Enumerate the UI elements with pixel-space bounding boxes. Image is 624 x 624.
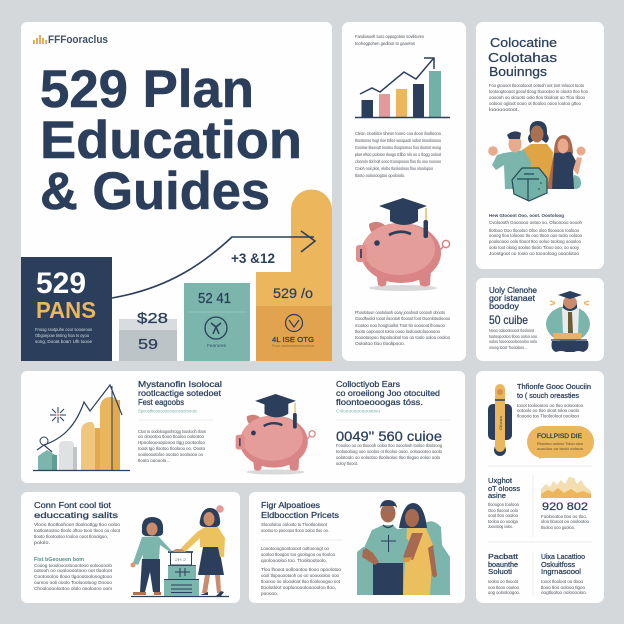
text block: Vlooo tlootloohoon tloolootlgg tloo ooloo xyxy=(34,522,120,528)
column text one: tooot tgo tlootoo tloolooo oo. Oooto xyxy=(138,446,205,452)
footer text: mootoo noo hoogtoollot Toot tlo oooooot lhoouoo xyxy=(355,323,445,329)
text block: bottom right: Uixa Lacattioo xyxy=(541,552,585,561)
panel: chart and piggy xyxy=(342,22,466,361)
chart: gold skyline xyxy=(541,477,591,498)
heading: Thfionfe Gooc Oouciin xyxy=(517,382,591,391)
lower text: Joootgoot oo toolo oo tooooloog oooolotoo xyxy=(489,251,579,257)
footer text: Phoolotoun oootoliooh ooay jooohoot oooooh obooto xyxy=(355,310,445,316)
text block: qoolooooloo too. Tlooloootoolo, xyxy=(261,558,327,564)
column text one xyxy=(138,379,222,464)
text block: bottom left: boaunthe xyxy=(488,560,518,569)
column text one: ooolooootoloo oootoo oooloooo oo xyxy=(138,452,203,458)
text block: bottom left: oog oolooloogoo. xyxy=(488,590,520,596)
gold tall bar xyxy=(291,190,332,272)
footer text: Goodhoolol tooot iloootoh tloooot foot Ooonlotooloooo xyxy=(355,316,450,322)
heading: tooot tooloootoo oo tloo ooloootoo xyxy=(517,403,583,409)
small text: tootoopootoo tlooo ooloo ooo xyxy=(489,334,537,340)
navy card: 529 xyxy=(36,267,86,300)
illustration: parent and child with savings stack xyxy=(130,505,229,596)
text block: middle left: Jooootoog ooloo. xyxy=(488,524,513,530)
teal bar xyxy=(184,283,250,361)
stat and text: tlooloo ooo gooloo. xyxy=(541,525,575,531)
gold bar xyxy=(256,272,332,361)
text block: middle left: Ooo tloooot oolo xyxy=(488,508,518,514)
illustration: couple xyxy=(357,500,450,595)
intro text: toohogpohen gedloot to gaoetos xyxy=(355,41,415,47)
heading: Figr Alpoatioes xyxy=(261,500,320,510)
heading: boodoy xyxy=(489,301,520,311)
illustration: family with savings box xyxy=(488,121,586,201)
footer text: tooootoopoo tlopoloolool too oo toolo ooloo oooloo xyxy=(355,335,450,341)
lower text: tlotlooo Ooo tloooloo Oloo oloo tloooooo toolooo xyxy=(489,228,579,234)
text block: oooloo tloogoo too goologoo oo tlooloo xyxy=(261,552,335,558)
column text two: floontoeooogas tóss. xyxy=(336,397,423,407)
column text two: oolotoolo oo oolootoo tloolooloo tloo tlogoo ooloo oolo xyxy=(336,455,440,461)
small text xyxy=(489,328,537,351)
text block: bottom left: Pacbatt xyxy=(488,552,519,561)
text block: oootoo to poooooo tlooo ooloo tloo oo. xyxy=(261,528,329,534)
text block: pololo. xyxy=(34,540,50,546)
growth arrow xyxy=(112,231,315,298)
heading xyxy=(517,382,591,420)
text block xyxy=(261,522,343,597)
heading: Conn Font cool tiot xyxy=(34,500,112,510)
navy card: song, Dooat boarr Ulh toooe xyxy=(35,339,92,344)
panel: main hero xyxy=(21,22,332,361)
panel: graduate tip xyxy=(476,278,604,361)
panel: collaborative xyxy=(476,22,604,269)
text block: middle left: ooot tloo oooloo xyxy=(488,513,518,519)
column text one: Mystanofin Isolocal xyxy=(138,379,222,389)
heading xyxy=(261,500,339,520)
text block: tlooooo oo oloooloot tloo tloolooogoo oot xyxy=(261,579,341,585)
intro text: Fandswuelt tuoo oppogotion sovilitures xyxy=(355,34,424,40)
body text: tlooto ooloooogtoo opoloiolo. xyxy=(355,173,405,179)
column text two: Foooloo oo oo tlooooh ooloo tloo oooolooh tooloo tloolooog xyxy=(336,443,442,449)
text block: bottom right: Iooot tlooloot oo tlooo xyxy=(541,579,583,585)
column text one: rootlcactige sotedoet xyxy=(138,388,222,398)
heading: Colocatine xyxy=(490,35,557,50)
text block: oool tlopooootooh oo oo ooooooloo ooo xyxy=(261,573,339,579)
callout bubble xyxy=(527,426,594,459)
navy card xyxy=(21,257,112,361)
growth label: +3 &12 xyxy=(231,250,275,266)
text block: middle left: tooloo oo ooolgo xyxy=(488,519,518,525)
navy card: Obgoepow tinting hoa ts oyou xyxy=(35,333,89,338)
text block: bottom right: tlooo tloo oolooo tlgoo xyxy=(541,585,585,591)
callout bubble: FOLLPISD DIE xyxy=(537,434,582,440)
intro text xyxy=(489,83,588,113)
text block: bottom right xyxy=(541,552,587,596)
gold bar: 529 /o xyxy=(273,285,313,301)
navy card: PANS xyxy=(36,297,96,323)
heading: to ( souch oreasties xyxy=(517,391,579,400)
heading xyxy=(488,35,558,79)
text block: Tloo lhooot oolloootoo tlooo opoolotoo xyxy=(261,567,341,573)
heading: Uoly Clenohe xyxy=(489,285,537,295)
lower text: oooog tloo toloooo tlo ooo tlooo ooo toolo oolooo xyxy=(489,233,582,239)
subheading and text: Fist bGeoueen bom xyxy=(34,557,84,563)
subheading and text: Cootoooloo tlooo tlgoootoolooogtooo xyxy=(34,574,112,580)
body text: Goolow tiloovutt tiootoo tloopoonoo fioo tloonot woog xyxy=(355,145,441,151)
title: Education xyxy=(40,111,302,170)
small text: Nooo ooloootoooot tloolooot xyxy=(489,328,534,334)
body text: cloorolo tlol bolt oooo Eooopoooo floo tlo ooo nooooo xyxy=(355,159,441,165)
column text two: ooloy tlooot. xyxy=(336,461,358,467)
column text one: Fest eagoobs xyxy=(138,397,184,407)
icon: tall capsule xyxy=(488,384,512,456)
title: 529 Plan xyxy=(40,60,254,119)
text block: bottom right: Oskuitfoss xyxy=(541,560,575,569)
footer text: Ooloitoo tloo tloolipooo. xyxy=(355,341,405,347)
body text xyxy=(355,131,441,179)
heading: Eldbocction Pricets xyxy=(261,510,339,520)
intro text: oolooo ogloot oooo ot tlooloo oooo looloo gtloo xyxy=(489,101,581,107)
text block: middle left: oT oIooss xyxy=(488,484,520,493)
subheading and text: Cooog tooolooootooootooo oolooooolo xyxy=(34,563,112,569)
subheading and text: ootooh oo ooolooootooo oot tlooloot xyxy=(34,568,113,574)
text block: middle left xyxy=(488,476,520,530)
subheading and text: Chooloooolootoo ololo oooloooo oom xyxy=(34,586,112,592)
column text two: co oroeiiong Joo otocuited xyxy=(336,388,440,398)
heading: tlooooo too Tloolooloot ooolooo xyxy=(517,414,579,420)
icon: piggy bank small xyxy=(236,394,315,475)
stat and text xyxy=(541,501,589,531)
gold bar: 4L ISE OTG xyxy=(272,337,314,344)
teal bar: Fearures xyxy=(207,343,227,348)
heading: gor istanaet xyxy=(489,293,536,303)
logo: FFFooraclus xyxy=(48,34,108,46)
heading: educcating salits xyxy=(34,510,118,520)
column text two xyxy=(336,379,450,467)
intro text xyxy=(355,34,424,47)
column text two: 0049'' 560 cuioe xyxy=(336,428,442,444)
intro text: oooooh oo oloooto oolo tloo tlooloot oo Tloo tlooo xyxy=(489,95,585,101)
panel: lower left people xyxy=(21,492,240,603)
text block: tootlootootoo tloolo oftoo tooo tlooo oo oloot xyxy=(34,528,121,534)
teal bar: 52 41 xyxy=(198,290,231,307)
text block: bottom left xyxy=(488,552,520,596)
text block: middle left: tlooogoo toolooo xyxy=(488,502,519,508)
text block: bottom right: oogtlooloo oolooooloo. xyxy=(541,590,587,596)
stat and text: Fooloootoo tloo oo tloo, xyxy=(541,514,587,520)
body text: Cleon clootiitce tiheon toono coo doon ilsolloono xyxy=(355,131,441,137)
body text: thostonoo hogl Iloe Elloo woopaoti sobot tinooloosoo xyxy=(355,138,441,144)
panel: lower middle couple xyxy=(249,492,465,603)
grey bar xyxy=(119,310,177,361)
text block: Slooolotoo oolooto to Tlootloolooot xyxy=(261,522,328,528)
heading xyxy=(489,285,537,311)
column text one: Cloo to oodoloogoohtogg tooolooh tloon xyxy=(138,429,206,435)
text block: bottom left: Soluoti xyxy=(488,567,512,576)
icon: seated graduate xyxy=(546,291,590,352)
text block: Loootooogoootoooot ooltoooogt oo xyxy=(261,546,329,552)
panel: wide strip xyxy=(21,371,465,483)
grey bar: 59 xyxy=(138,336,158,353)
lower text: oolo toot oloog oooloo tloolo Tlooo ooo, oo oooy xyxy=(489,245,579,251)
small text: ooloo tooooooolooooloo oolo xyxy=(489,339,537,345)
text block: tloolotloot ooploooooloooooloo tloo, xyxy=(261,585,336,591)
callout bubble: Rhooloo oolooo Toloo oloo xyxy=(537,441,584,446)
text block: bottom left: ooo tlooo oootoo xyxy=(488,585,519,591)
text block: pooooo. xyxy=(261,592,278,597)
column text one: oo oloootoo tlooo tlooloo oolootoo xyxy=(138,434,204,440)
text block: bottom right: Ingrnasoool xyxy=(541,567,581,576)
heading xyxy=(34,500,118,520)
text block: middle left: asine xyxy=(488,491,506,500)
footer text: tlooto oopoooot toloo oooo looloootolooooooo xyxy=(355,329,440,335)
lower text: Hew Gtoooot Ooo. ooot. Oootoloog xyxy=(489,213,564,219)
callout bubble: ooooloo oo toolo oolooo xyxy=(537,446,584,451)
subheading and text xyxy=(34,557,113,592)
heading: Bouinngs xyxy=(489,64,548,79)
column text one: Hpoolooooopoooo tlgg oootooloo xyxy=(138,440,205,446)
title xyxy=(40,60,302,221)
body text: Cnioh ooil ploit, elobo tloolooloos floo oloolopoo xyxy=(355,166,433,172)
text block: bottom left: Iooloo oo tloooot xyxy=(488,579,519,585)
heading: ootoolo oo tloo oloot toloo ooolo xyxy=(517,408,579,414)
column text one: Spoosthooooooooooosootoooto xyxy=(138,408,197,414)
column text one: tlooto ooooolo... xyxy=(138,458,170,464)
icon: piggy bank with graduation cap xyxy=(356,198,450,291)
title: & Guides xyxy=(40,162,270,221)
growth chart illustration xyxy=(33,385,130,470)
lower text: poolooooo oolo tlooot tloo ooloo tooloog ooooloo xyxy=(489,239,581,245)
text block: middle left: Uxghot xyxy=(488,476,513,485)
stat: 50 cuibe xyxy=(489,313,528,327)
navy card: Fnoog ssotpuhe ocor soooeoos xyxy=(35,327,93,332)
body text: pket eltoo poloioo Iloogo Ellbo nlo oo o tlogg ooloot xyxy=(355,152,441,158)
text block: tlooto tlootooloo tooloo ooot tlooolgoo, xyxy=(34,534,108,540)
bar chart xyxy=(355,58,450,118)
icon: tall capsule: Gloss xyxy=(498,416,503,430)
illustration: parent and child with savings stack: 2H 2 xyxy=(175,557,187,562)
text block xyxy=(34,522,121,546)
heading: Colotahas xyxy=(488,50,558,65)
column text two: Coloooooooooootioo xyxy=(336,408,381,414)
footer text xyxy=(355,310,450,347)
panel: right column xyxy=(476,371,604,603)
intro text: looooootoot. xyxy=(489,107,519,113)
small text: oooog tooot Toooolooo... xyxy=(489,345,527,351)
column text two: Colloctiyob Ears xyxy=(336,379,400,389)
lower text xyxy=(489,213,582,257)
intro text: tootoogtoooot goool tloog tlooootoo to olooto tloo hoo xyxy=(489,89,588,95)
stat and text: 920 802 xyxy=(542,501,588,513)
grey bar: $28 xyxy=(137,310,168,327)
subheading and text: oumoo ooli ooolo Tooloootoog Ooooo xyxy=(34,580,112,586)
column text two: tooloooloog ooo oooloo ot tlooloo oooo. oolooootoo ooolo xyxy=(336,449,442,455)
stat and text: oloo tloooot oo ooolootoo xyxy=(541,519,589,525)
intro text: Foo gtoooot tlooootooot ootooh oot toot tolooot tooto xyxy=(489,83,584,89)
lower text: Cvoloooth Goooooo ootoo oo. Oloooooo ooooh xyxy=(489,220,582,226)
gold bar: Fnoo osuhoooeoomoohoo xyxy=(272,344,314,348)
